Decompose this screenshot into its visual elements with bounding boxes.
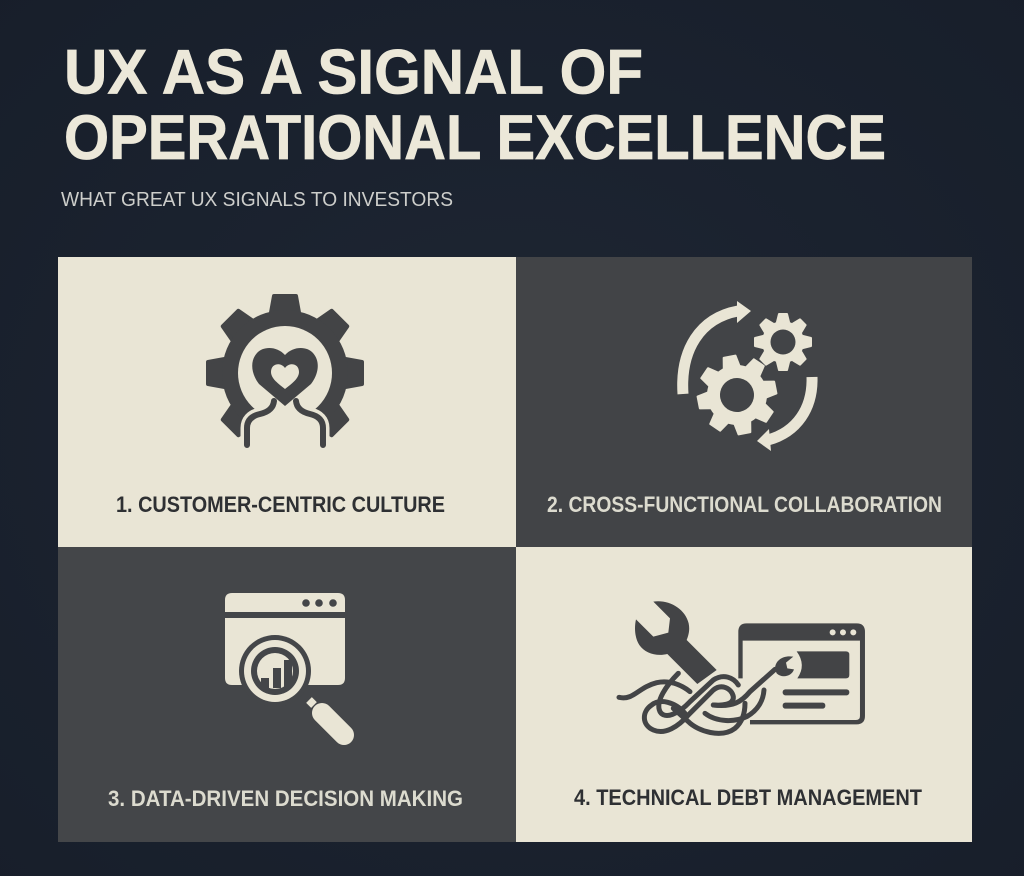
browser window bbox=[738, 623, 865, 724]
panel 1: customer-centric culture bbox=[58, 257, 516, 547]
panel 2: cross-functional collaboration bbox=[516, 257, 972, 547]
label 3: 3. DATA-DRIVEN DECISION MAKING bbox=[108, 786, 463, 811]
small wrench head bbox=[775, 656, 794, 676]
tangled cable bbox=[619, 669, 775, 733]
icon: gears with cycle arrows bbox=[683, 301, 812, 451]
panel 3: data-driven decision making bbox=[58, 547, 516, 842]
icon: wrench, tangled cable and browser bbox=[619, 601, 865, 733]
icon: gear with heart and person bbox=[208, 296, 362, 452]
title: UX AS A SIGNAL OF bbox=[64, 38, 643, 108]
label 1: 1. CUSTOMER-CENTRIC CULTURE bbox=[116, 492, 445, 517]
title: OPERATIONAL EXCELLENCE bbox=[64, 103, 886, 173]
wrench bbox=[635, 601, 717, 684]
title bbox=[64, 38, 886, 173]
label 4: 4. TECHNICAL DEBT MANAGEMENT bbox=[574, 785, 922, 810]
icon: browser with magnifier and bars bbox=[225, 593, 345, 735]
panel 4: technical debt management bbox=[516, 547, 972, 842]
label 2: 2. CROSS-FUNCTIONAL COLLABORATION bbox=[547, 492, 942, 517]
subtitle: WHAT GREAT UX SIGNALS TO INVESTORS bbox=[61, 188, 453, 211]
